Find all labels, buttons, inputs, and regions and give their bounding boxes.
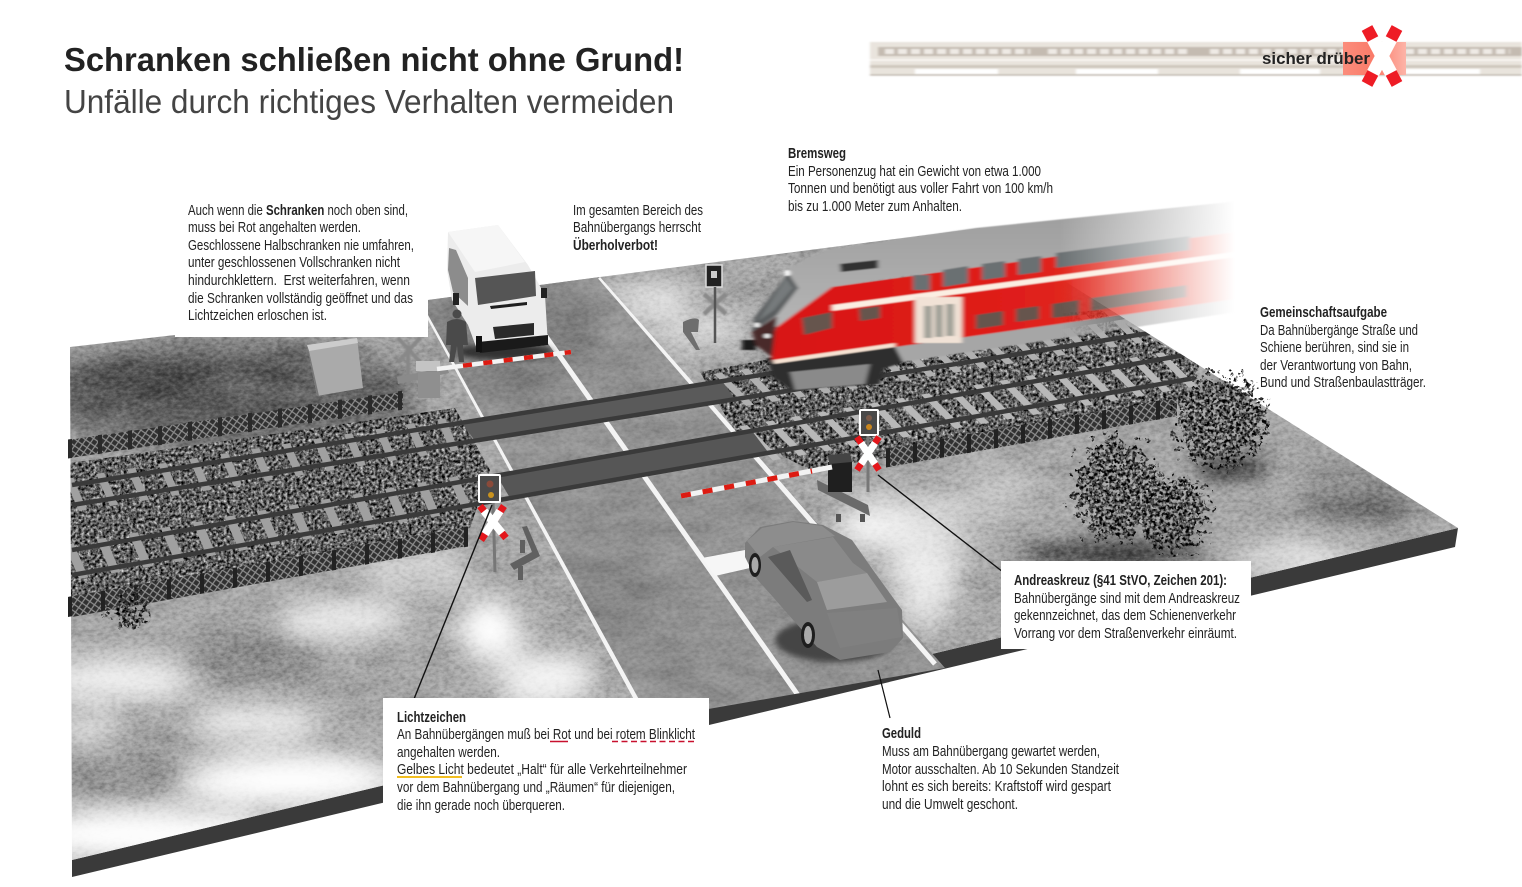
panel: Lichtzeichen: Gelbes Licht bedeutet „Halt“ für alle Verkehrteilnehmer xyxy=(397,761,687,778)
van xyxy=(447,225,553,360)
ballast right xyxy=(700,310,1200,470)
leader line: Geduld xyxy=(878,670,890,718)
text: Bremsweg xyxy=(788,145,1053,215)
level crossing plate back xyxy=(462,381,735,441)
car trunk xyxy=(827,608,902,648)
text: Gemeinschaftsaufgabe: Bund und Straßenbaulastträger. xyxy=(1260,374,1426,391)
leader line: Lichtzeichen xyxy=(414,505,492,699)
headlights xyxy=(754,270,790,338)
text: Schranken rule: muss bei Rot angehalten werden. xyxy=(188,219,361,236)
text: Geduld xyxy=(882,725,1120,813)
undercarriage xyxy=(763,347,905,389)
text: Schranken rule: unter geschlossenen Vollschranken nicht xyxy=(188,254,401,271)
text: Schranken rule: Lichtzeichen erloschen ist. xyxy=(188,307,327,324)
panel: Schranken text box xyxy=(175,190,428,337)
text: Überholverbot: Bahnübergangs herrscht xyxy=(573,219,702,236)
panel: Lichtzeichen xyxy=(383,698,709,825)
text: Gemeinschaftsaufgabe: Da Bahnübergänge Straße und xyxy=(1260,322,1418,339)
text: Geduld: Motor ausschalten. Ab 10 Sekunden Standzeit xyxy=(882,761,1120,778)
car roof xyxy=(773,537,867,582)
door xyxy=(915,297,962,343)
road markings xyxy=(426,277,935,706)
front barrier xyxy=(681,467,832,496)
back right signal xyxy=(683,265,726,350)
ground edge xyxy=(72,528,1458,877)
underline: Rot xyxy=(550,740,568,742)
fence right xyxy=(886,398,1178,467)
text: Gemeinschaftsaufgabe: Gemeinschaftsaufgabe xyxy=(1260,304,1387,321)
sleepers right back track xyxy=(730,318,1180,390)
panel: Andreaskreuz: gekennzeichnet, das dem Schienenverkehr xyxy=(1014,607,1236,624)
panel: Andreaskreuz: Andreaskreuz (§41 StVO, Zeichen 201): xyxy=(1014,572,1227,589)
bush front xyxy=(1128,467,1200,543)
rails xyxy=(72,316,1195,575)
car rear window xyxy=(817,573,887,610)
white stripe xyxy=(832,250,1250,311)
panel: Lichtzeichen: Lichtzeichen xyxy=(397,709,466,726)
panel: Andreaskreuz: Vorrang vor dem Straßenverkehr einräumt. xyxy=(1014,625,1237,642)
bush middle xyxy=(1070,428,1146,532)
stop line xyxy=(702,550,750,576)
panel: Lichtzeichen: An Bahnübergängen muß bei Rot und bei rotem Blinklicht xyxy=(397,726,696,743)
sleepers right front track xyxy=(730,369,1180,448)
level crossing plate front xyxy=(497,431,768,498)
guard rail left xyxy=(510,526,540,580)
back barrier xyxy=(437,352,571,369)
car hood xyxy=(747,522,835,557)
nose tip xyxy=(752,316,777,357)
text: Schranken rule: die Schranken vollständig geöffnet und das xyxy=(188,290,413,307)
car side windows xyxy=(768,550,812,602)
title: Schranken schließen nicht ohne Grund! xyxy=(64,41,684,78)
cab window xyxy=(752,273,798,332)
underline: rotem Blinklicht xyxy=(612,740,695,742)
sleepers left front track xyxy=(72,488,492,562)
text: Bremsweg: bis zu 1.000 Meter zum Anhalten. xyxy=(788,198,962,215)
panel: Lichtzeichen: vor dem Bahnübergang und „Räumen“ für diejenigen, xyxy=(397,779,675,796)
panel: Andreaskreuz: Bahnübergänge sind mit dem Andreaskreuz xyxy=(1014,590,1240,607)
subtitle: Unfälle durch richtiges Verhalten vermeiden xyxy=(64,83,674,120)
bush small left xyxy=(106,585,140,619)
text: Überholverbot: Überholverbot! xyxy=(573,237,658,254)
text: Bremsweg: Bremsweg xyxy=(788,145,846,162)
coupler xyxy=(742,340,756,350)
text: Schranken rule: hindurchklettern. Erst weiterfahren, wenn xyxy=(188,272,410,289)
car xyxy=(745,521,903,662)
underline: Gelbes Licht xyxy=(397,776,462,778)
text: Bremsweg: Tonnen und benötigt aus voller Fahrt von 100 km/h xyxy=(788,180,1053,197)
red body xyxy=(771,230,1250,362)
ground slab xyxy=(10,220,1470,880)
road xyxy=(428,277,945,709)
lower cream stripe xyxy=(773,343,895,364)
signal right with St Andrew's cross xyxy=(857,410,879,492)
leader line: Andreaskreuz xyxy=(878,475,1003,572)
car wheels xyxy=(749,553,815,648)
text: Schranken rule xyxy=(188,202,414,324)
upper windows xyxy=(913,236,1190,290)
level crossing scene xyxy=(10,200,1470,880)
back left signal and barrier housing xyxy=(397,338,449,398)
lower skirt xyxy=(892,302,1219,362)
logo wordmark: sicher drüber xyxy=(1262,50,1371,68)
text: Geduld: Muss am Bahnübergang gewartet werden, xyxy=(882,743,1100,760)
text: Gemeinschaftsaufgabe xyxy=(1260,304,1426,391)
lower windows xyxy=(802,285,1187,335)
panel: Lichtzeichen: die ihn gerade noch überqueren. xyxy=(397,797,565,814)
utility cabinet xyxy=(307,338,363,396)
text: Geduld: lohnt es sich bereits: Kraftstoff wird gespart xyxy=(882,778,1112,795)
sleepers left back track xyxy=(72,428,492,495)
panel: Andreaskreuz xyxy=(1001,561,1251,649)
text: Geduld: Geduld xyxy=(882,725,921,742)
fence front left xyxy=(68,527,468,617)
text: Bremsweg: Ein Personenzug hat ein Gewicht von etwa 1.000 xyxy=(788,163,1041,180)
text: Gemeinschaftsaufgabe: der Verantwortung von Bahn, xyxy=(1260,357,1412,374)
text: Geduld: und die Umwelt geschont. xyxy=(882,796,1018,813)
roof xyxy=(764,204,1220,328)
man beside barrier xyxy=(446,310,468,362)
logo: sicher drüber train banner xyxy=(870,28,1522,84)
ballast left xyxy=(70,408,490,600)
fence back left xyxy=(68,392,403,458)
text: Gemeinschaftsaufgabe: Schiene berühren, sind sie in xyxy=(1260,339,1409,356)
logo cross xyxy=(1367,28,1397,84)
bush right xyxy=(1168,366,1256,458)
text: Schranken rule: Auch wenn die Schranken noch oben sind, xyxy=(188,202,408,219)
panel: Lichtzeichen: angehalten werden. xyxy=(397,744,500,761)
text: Überholverbot: Im gesamten Bereich des xyxy=(573,202,703,219)
roof vent xyxy=(840,260,878,272)
front barrier housing and guard xyxy=(817,453,870,522)
train xyxy=(742,200,1250,390)
text: Überholverbot xyxy=(573,202,703,254)
signal left with St Andrew's cross xyxy=(479,475,506,572)
text: Schranken rule: Geschlossene Halbschranken nie umfahren, xyxy=(188,237,414,254)
